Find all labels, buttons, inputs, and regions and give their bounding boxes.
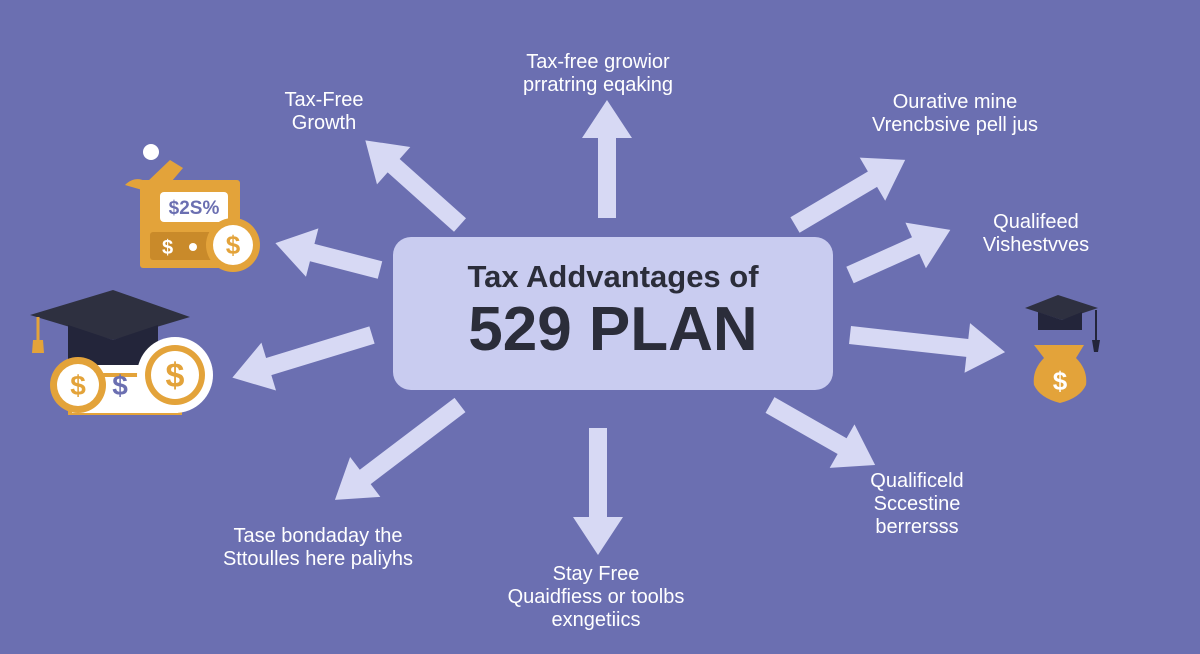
label: lower left: Sttoulles here paliyhs xyxy=(223,548,413,570)
icon: money and growth: $2S% xyxy=(169,198,219,219)
arrow: upper-right xyxy=(782,138,918,247)
arrow: top xyxy=(582,100,632,218)
icon: graduation cap with coins: $ xyxy=(112,370,128,401)
label: top xyxy=(523,51,673,96)
arrow: left xyxy=(225,311,379,402)
icon: graduation cap with coins: $ xyxy=(166,357,185,395)
arrow: lower-left xyxy=(320,385,475,520)
label: lower left: Tase bondaday the xyxy=(233,525,403,547)
label: bottom: Quaidfiess or toolbs xyxy=(508,586,684,608)
label: right xyxy=(983,211,1089,256)
title line 2: 529 PLAN xyxy=(468,295,758,364)
arrow: right xyxy=(847,310,1008,377)
label: upper right xyxy=(872,91,1038,136)
icon: graduation cap with coins: $ xyxy=(70,370,86,401)
icon: money and growth: $ xyxy=(226,230,241,260)
icon: money and growth xyxy=(125,144,260,272)
arrow: upper-left xyxy=(349,122,477,244)
icon: money and growth: $ xyxy=(162,237,173,259)
label: lower right: Qualificeld xyxy=(870,470,964,492)
label: lower right xyxy=(870,470,964,538)
label: bottom xyxy=(508,563,684,631)
label: lower right: berrersss xyxy=(875,516,959,538)
arrow: right upper xyxy=(840,207,961,298)
label: upper right: Vrencbsive pell jus xyxy=(872,114,1038,136)
icon: graduation cap with coins xyxy=(30,290,213,415)
center panel xyxy=(393,237,833,390)
title line 1: Tax Addvantages of xyxy=(467,259,759,294)
arrow: lower-right xyxy=(758,383,887,487)
label: bottom: exngetiics xyxy=(552,609,640,631)
label: upper right: Ourative mine xyxy=(893,91,1017,113)
label: lower right: Sccestine xyxy=(874,493,960,515)
icon: cap with money bag: $ xyxy=(1053,366,1068,396)
label: top: Tax-free growior xyxy=(526,51,670,73)
label: tax-free growth: Tax-Free xyxy=(285,89,363,111)
label: lower left xyxy=(223,525,413,570)
label: right: Qualifeed xyxy=(993,211,1079,233)
label: right: Vishestvves xyxy=(983,234,1089,256)
label: tax-free growth: Growth xyxy=(292,112,356,134)
arrow: left upper xyxy=(269,219,386,294)
arrow: bottom xyxy=(573,428,623,555)
icon: cap with money bag xyxy=(1025,295,1100,403)
label: bottom: Stay Free xyxy=(553,563,639,585)
label: top: prratring eqaking xyxy=(523,74,673,96)
label: tax-free growth xyxy=(284,89,363,134)
